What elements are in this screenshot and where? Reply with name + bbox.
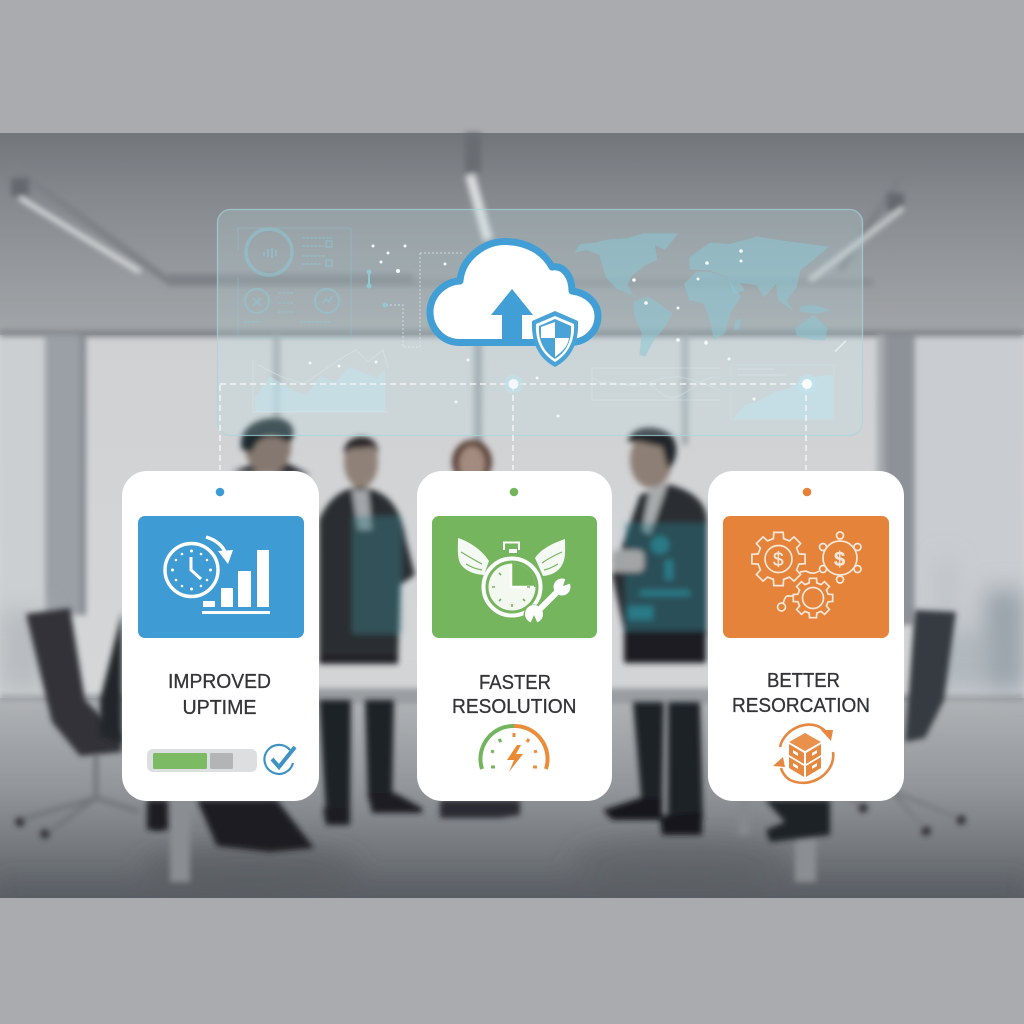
circuit lines and particles (308, 244, 756, 418)
label: RESOLUTION (452, 696, 576, 718)
status dot (216, 488, 224, 496)
icon tile: clock and rising bars (138, 516, 304, 638)
icon: boxes with cycle arrows (773, 725, 833, 783)
connector node: right (798, 374, 816, 394)
floor (0, 698, 1024, 898)
status dot (510, 488, 518, 496)
label: FASTER (479, 672, 551, 694)
upload arrow (491, 289, 533, 343)
icon: speed gauge (480, 726, 548, 772)
person: left, behind first card (100, 418, 314, 852)
icon: cloud with upload arrow and shield (430, 242, 598, 367)
world map (574, 233, 846, 357)
glass dashboard panel (218, 210, 862, 470)
wings (458, 538, 565, 576)
label: BETTER (767, 670, 840, 692)
panel: improved uptime card (122, 471, 319, 801)
status dot (803, 488, 811, 496)
wrench (524, 577, 572, 626)
dashboard gauges (238, 228, 351, 338)
bottom band (0, 898, 1024, 1024)
area chart left (253, 350, 388, 412)
table (170, 663, 820, 882)
connector node: centre (504, 374, 523, 394)
label (732, 670, 870, 717)
person: woman behind second card (440, 440, 520, 818)
person: centre right (603, 428, 707, 835)
area chart right (731, 365, 834, 420)
panel: better resorcation card (708, 471, 904, 801)
shield (532, 311, 578, 367)
floor reflections (0, 836, 1024, 898)
panel: faster resolution card (417, 471, 612, 801)
ceiling (0, 133, 1024, 338)
person: centre left (319, 436, 422, 825)
label: IMPROVED (168, 671, 271, 693)
label (168, 671, 271, 719)
icon tile: winged stopwatch and wrench (432, 516, 597, 638)
label: UPTIME (182, 697, 256, 719)
connector lines (220, 384, 806, 470)
left chair (15, 608, 163, 839)
background photo: blurred meeting room (0, 133, 1024, 898)
window wall (0, 335, 1024, 703)
icon tile: gears and coins (723, 516, 889, 638)
top band (0, 0, 1024, 133)
right chair (840, 610, 966, 836)
icon: check mark (264, 745, 295, 774)
icon tile: gears and coins: $ (773, 550, 784, 571)
person: behind third card (765, 800, 830, 842)
icon tile: gears and coins: $ (834, 549, 845, 571)
room structure (0, 133, 1024, 700)
progress bar (147, 749, 257, 772)
distant city (0, 560, 1024, 690)
label: RESORCATION (732, 695, 870, 717)
map location dots (632, 249, 743, 345)
line chart middle (592, 368, 720, 400)
label (452, 672, 576, 718)
